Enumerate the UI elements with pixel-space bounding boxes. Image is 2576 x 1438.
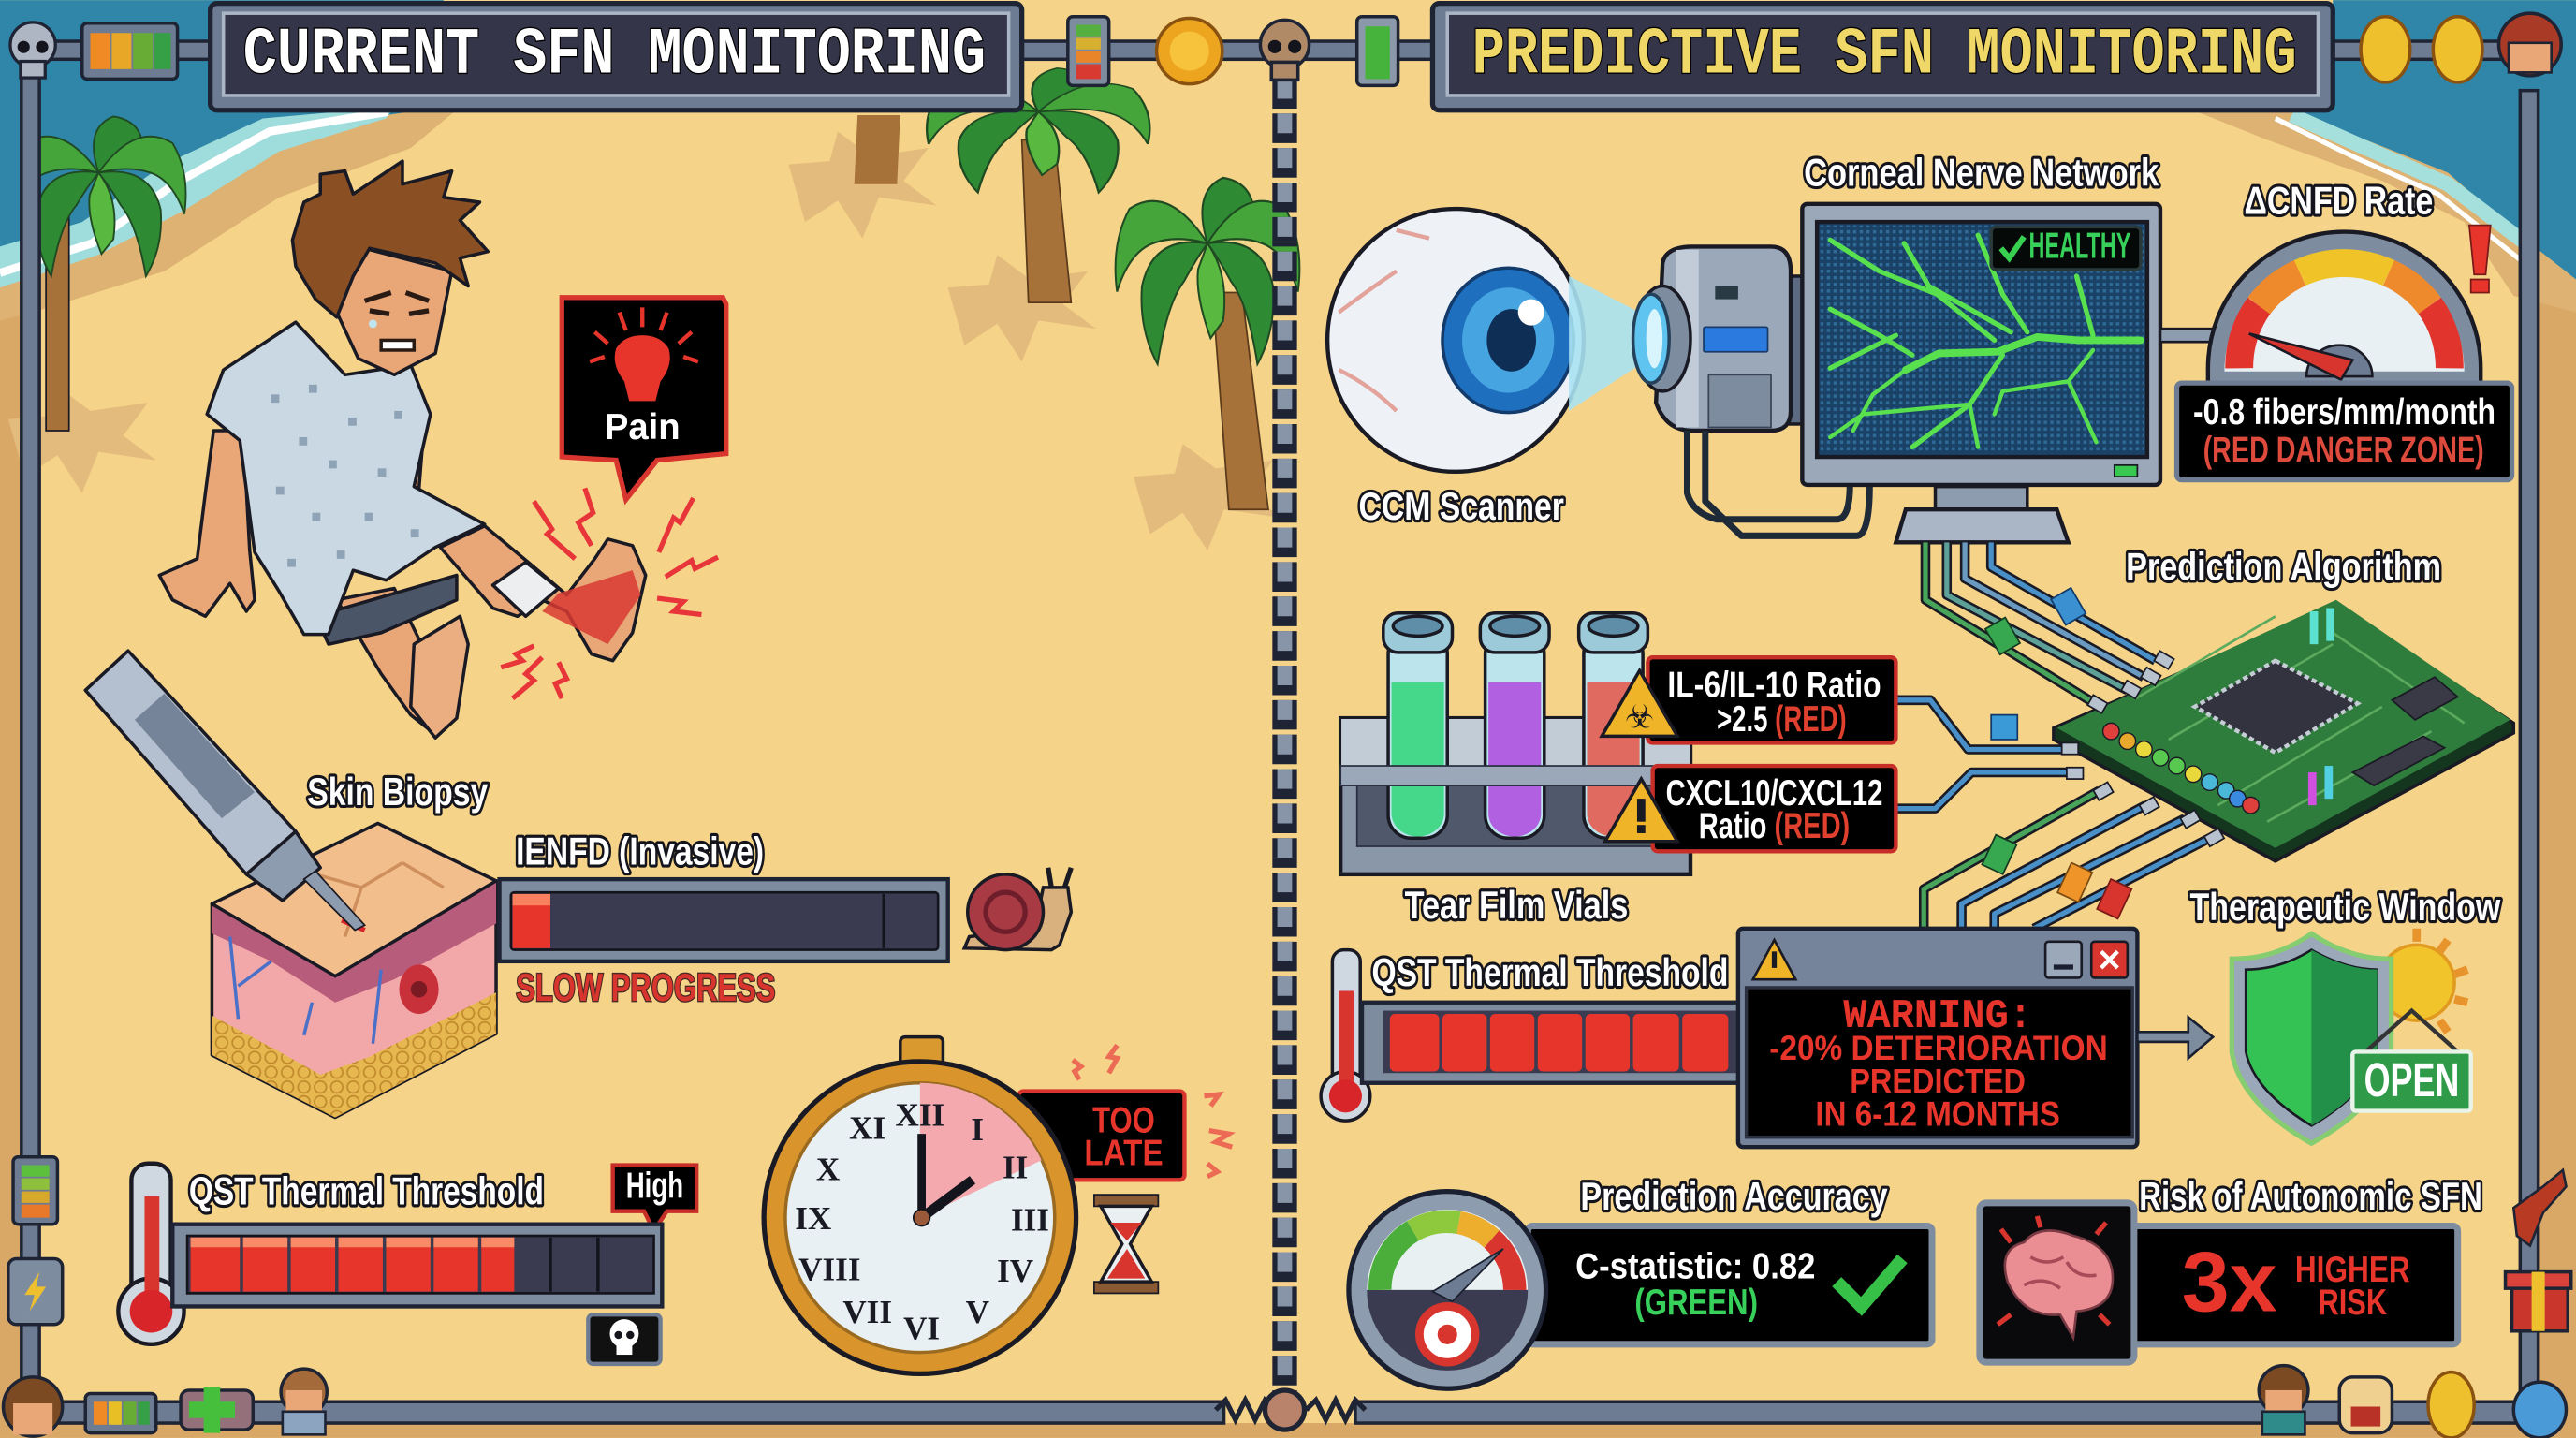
- label: delta CNFD rate: ΔCNFD Rate: [2244, 178, 2433, 222]
- main chip: [2195, 661, 2358, 753]
- icon: top skull left: [10, 22, 55, 78]
- icon: battery top left: [82, 23, 178, 79]
- OPEN sign: [2352, 1011, 2471, 1111]
- CXCL10 CXCL12 callout: Ratio (RED): [1699, 806, 1850, 846]
- tear film vials in rack: [1340, 613, 1690, 874]
- wires algorithm to warning window: [1924, 790, 2210, 929]
- shorts: [315, 575, 457, 644]
- stopwatch clock: XII: [896, 1096, 944, 1133]
- icon: biohazard triangle: ☣: [1625, 698, 1654, 737]
- stopwatch clock: [764, 1037, 1076, 1373]
- pain bubble: [562, 298, 726, 500]
- delta CNFD readout: -0.8 fibers/mm/month: [2193, 392, 2496, 433]
- healthy tag: HEALTHY: [2029, 227, 2131, 267]
- stopwatch clock: II: [1003, 1150, 1028, 1186]
- icon: left side battery: [13, 1157, 57, 1225]
- OPEN sign: OPEN: [2364, 1053, 2459, 1107]
- right QST thermometer: [1321, 950, 1370, 1121]
- stopwatch clock: VI: [903, 1311, 940, 1347]
- pain bolts around foot: [501, 488, 718, 698]
- label: corneal nerve network: Corneal Nerve Network: [1804, 150, 2159, 194]
- icon: left side bolt box: [8, 1259, 63, 1325]
- gown pattern: [271, 385, 419, 567]
- skin cross section cube: [212, 823, 496, 1118]
- scanner beam: [1569, 276, 1640, 411]
- extended leg and foot: [440, 526, 646, 661]
- stopwatch clock: V: [966, 1294, 989, 1330]
- nerve branches: [1830, 235, 2141, 448]
- High bubble: High: [626, 1167, 683, 1207]
- label: skin biopsy: Skin Biopsy: [307, 770, 489, 814]
- shield therapeutic window: [2234, 937, 2389, 1140]
- stopwatch clock: I: [971, 1111, 984, 1148]
- warning window: WARNING:: [1843, 993, 2032, 1040]
- label: right QST thermal threshold: QST Thermal Threshold: [1372, 950, 1728, 994]
- monitor with corneal nerve network: [1802, 204, 2160, 485]
- center chain divider: [1216, 79, 1365, 1430]
- stopwatch clock: III: [1011, 1202, 1049, 1239]
- skull tag: [588, 1314, 661, 1364]
- stopwatch clock: VIII: [798, 1251, 860, 1287]
- label: IENFD invasive: IENFD (Invasive): [516, 829, 764, 873]
- stopwatch clock: VII: [842, 1294, 892, 1330]
- bottom left icons: [4, 1369, 327, 1436]
- stopwatch clock: IV: [997, 1253, 1033, 1289]
- monitor stand: [1895, 487, 2069, 542]
- bottom right icons: [2259, 1366, 2566, 1438]
- header: predictive SFN monitoring: PREDICTIVE SFN MONITORING: [1472, 19, 2297, 93]
- warning window: [1738, 929, 2137, 1147]
- icon: red exclamation: [2469, 226, 2491, 293]
- torn hospital gown: [207, 322, 485, 635]
- C-statistic panel: C-statistic: 0.82: [1575, 1247, 1815, 1287]
- scanner cables: [1687, 431, 1869, 536]
- face: [337, 246, 452, 374]
- header: predictive SFN monitoring: [1432, 4, 2333, 110]
- vial 1: [1383, 613, 1453, 838]
- label: risk of autonomic SFN: Risk of Autonomic SFN: [2139, 1174, 2482, 1218]
- warning window: -20% DETERIORATION: [1769, 1029, 2108, 1067]
- skin biopsy punch tool: [85, 651, 365, 931]
- arms and hand: [159, 427, 424, 616]
- wires monitor to algorithm: [1925, 542, 2156, 703]
- label: tear film vials: Tear Film Vials: [1405, 883, 1628, 927]
- risk panel: HIGHER: [2295, 1250, 2410, 1290]
- face details: [365, 293, 429, 350]
- C-statistic panel: [1528, 1225, 1932, 1344]
- risk panel: [2128, 1225, 2458, 1344]
- stopwatch clock: X: [816, 1151, 840, 1187]
- arrow to therapeutic window: [2137, 1018, 2213, 1058]
- delta CNFD readout: [2177, 383, 2512, 480]
- icon: snail: [964, 868, 1071, 950]
- CXCL10 CXCL12 callout: CXCL10/CXCL12: [1666, 773, 1882, 814]
- right QST bar: [1362, 1003, 1743, 1083]
- healthy tag: [1991, 227, 2141, 270]
- icon: hourglass: [1094, 1195, 1158, 1293]
- palm trees: [8, 68, 1299, 550]
- left QST bar: [172, 1225, 662, 1306]
- window buttons: [2045, 942, 2128, 977]
- spiky hair: [292, 161, 488, 317]
- accuracy gauge: [1349, 1192, 1546, 1388]
- C-statistic panel: (GREEN): [1634, 1283, 1758, 1323]
- icon: center skull: [1260, 20, 1310, 80]
- label: prediction accuracy: Prediction Accuracy: [1580, 1174, 1888, 1218]
- risk panel: RISK: [2318, 1283, 2387, 1323]
- risk panel: 3x: [2182, 1235, 2277, 1330]
- IENFD progress bar: [500, 879, 948, 961]
- far leg: [337, 588, 468, 738]
- label: CCM scanner: CCM Scanner: [1358, 484, 1564, 528]
- icon: vertical battery mixed: [1068, 17, 1109, 85]
- connector monitor to gauge: [2160, 329, 2213, 342]
- pain bubble: Pain: [605, 407, 681, 448]
- warning window: PREDICTED: [1850, 1062, 2026, 1100]
- TOO LATE tag: [1018, 1092, 1184, 1180]
- LED row: [2103, 723, 2259, 814]
- vial 3: [1579, 613, 1647, 838]
- brain panel: [1980, 1203, 2134, 1362]
- label: left QST thermal threshold: QST Thermal Threshold: [189, 1169, 544, 1213]
- stopwatch clock: IX: [795, 1200, 831, 1237]
- eyeball: [1327, 209, 1584, 472]
- delta CNFD gauge: [2208, 232, 2481, 385]
- IL-6 IL-10 callout: [1647, 657, 1895, 742]
- icon: green battery: [1357, 17, 1398, 85]
- icon: right side figure and gift: [2506, 1170, 2571, 1331]
- header: current SFN monitoring: CURRENT SFN MONITORING: [243, 19, 986, 93]
- pink alarm marks: [1073, 1045, 1232, 1177]
- icon: coin: [1157, 18, 1222, 84]
- icon: top right character: [2499, 13, 2561, 76]
- TOO LATE tag: LATE: [1084, 1134, 1164, 1174]
- delta CNFD readout: (RED DANGER ZONE): [2203, 430, 2484, 470]
- icon: sun: [2378, 929, 2467, 1032]
- icon: biohazard triangle: [1602, 670, 1677, 737]
- CCM scanner device: [1633, 246, 1804, 431]
- High bubble: [613, 1166, 696, 1231]
- circuit board prediction algorithm: [2054, 600, 2513, 861]
- IL-6 IL-10 callout: IL-6/IL-10 Ratio: [1667, 665, 1881, 705]
- TOO LATE tag: TOO: [1092, 1100, 1155, 1140]
- IL-6 IL-10 callout: >2.5 (RED): [1717, 699, 1847, 740]
- window warning icon: [1753, 940, 1795, 979]
- CXCL10 CXCL12 callout: [1653, 766, 1895, 851]
- edge connectors: [2062, 651, 2224, 846]
- icon: coins right: [2361, 17, 2482, 82]
- vial 2: [1480, 613, 1549, 838]
- label: therapeutic window: Therapeutic Window: [2190, 885, 2500, 929]
- left QST thermometer: [118, 1164, 184, 1344]
- warning window: IN 6-12 MONTHS: [1815, 1094, 2060, 1133]
- wires biomarkers to algorithm: [1897, 700, 2073, 809]
- rack crossbar: [1340, 766, 1690, 785]
- small chips: [2392, 677, 2458, 720]
- icon: warning triangle: [1605, 779, 1677, 842]
- header: current SFN monitoring: [211, 4, 1022, 110]
- patient character: [159, 161, 646, 738]
- stopwatch clock: XI: [849, 1109, 886, 1146]
- label: slow progress: SLOW PROGRESS: [516, 965, 775, 1009]
- label: prediction algorithm: Prediction Algorithm: [2126, 545, 2441, 589]
